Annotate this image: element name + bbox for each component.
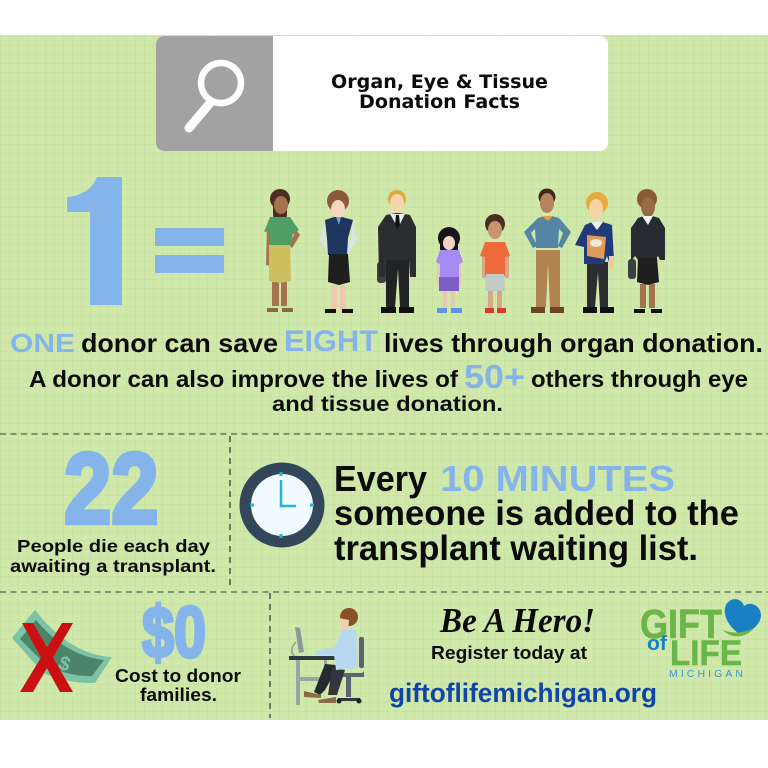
person: woman in navy vest — [320, 190, 357, 313]
logo: Gift of Life Michigan: MICHIGAN — [669, 668, 743, 680]
statement: one donor saves eight: EIGHT — [284, 325, 378, 358]
logo: Gift of Life Michigan — [640, 599, 761, 680]
red cross — [20, 623, 73, 692]
title text: Donation Facts — [359, 91, 520, 113]
stat: 22 people: 22 — [64, 432, 159, 545]
icon: magnifying glass — [189, 63, 241, 128]
logo: Gift of Life Michigan: GIFT — [640, 601, 722, 647]
person: girl in purple — [436, 227, 463, 313]
call to action: giftoflifemichigan.org — [389, 678, 657, 708]
person: woman in green — [264, 189, 300, 312]
statement: every 10 minutes: someone is added to the — [334, 494, 739, 533]
big number one: 1 — [54, 141, 160, 353]
statement: fifty plus others: and tissue donation. — [272, 393, 503, 416]
person: student with book — [575, 192, 614, 313]
logo: Gift of Life Michigan: LIFE — [670, 634, 742, 673]
call to action: Register today at — [431, 643, 587, 663]
logo: Gift of Life Michigan: of — [647, 633, 667, 655]
stat: zero dollars: Cost to donor — [115, 666, 241, 686]
statement: one donor saves eight — [10, 325, 763, 358]
eight people — [264, 188, 665, 313]
icon: crossed-out money: $ — [55, 652, 73, 677]
stat: 22 people — [10, 432, 216, 576]
statement: one donor saves eight: ONE — [10, 328, 75, 358]
person: man in blue sweater — [524, 188, 571, 313]
statement: one donor saves eight: donor can save — [81, 328, 278, 358]
statement: fifty plus others — [29, 358, 748, 416]
statement: every 10 minutes: 10 MINUTES — [440, 458, 675, 499]
stat: 22 people: awaiting a transplant. — [10, 556, 216, 576]
statement: one donor saves eight: lives through organ donation. — [384, 328, 763, 358]
equals sign — [155, 228, 224, 273]
statement: fifty plus others: 50+ — [464, 358, 525, 395]
statement: every 10 minutes: transplant waiting list. — [334, 529, 698, 568]
statement: every 10 minutes — [334, 458, 739, 568]
call to action: Be A Hero! — [439, 601, 595, 640]
stat: 22 people: People die each day — [17, 536, 210, 556]
statement: fifty plus others: others through eye — [531, 366, 748, 392]
stat: zero dollars: $0 — [142, 592, 206, 672]
title text — [331, 71, 548, 113]
call to action — [389, 601, 657, 708]
icon: crossed-out money — [12, 610, 112, 692]
statement: fifty plus others: A donor can also improve the lives of — [29, 366, 458, 392]
person: boy in orange — [480, 214, 510, 313]
icon: clock — [240, 462, 324, 548]
person: woman in black suit — [628, 189, 665, 313]
icon: person at computer — [289, 608, 364, 705]
title banner — [156, 36, 608, 151]
statement: every 10 minutes: Every — [334, 458, 427, 499]
stat: zero dollars — [115, 592, 241, 705]
stat: zero dollars: families. — [140, 685, 217, 705]
person: man in black suit — [377, 190, 416, 313]
title text: Organ, Eye & Tissue — [331, 71, 548, 93]
